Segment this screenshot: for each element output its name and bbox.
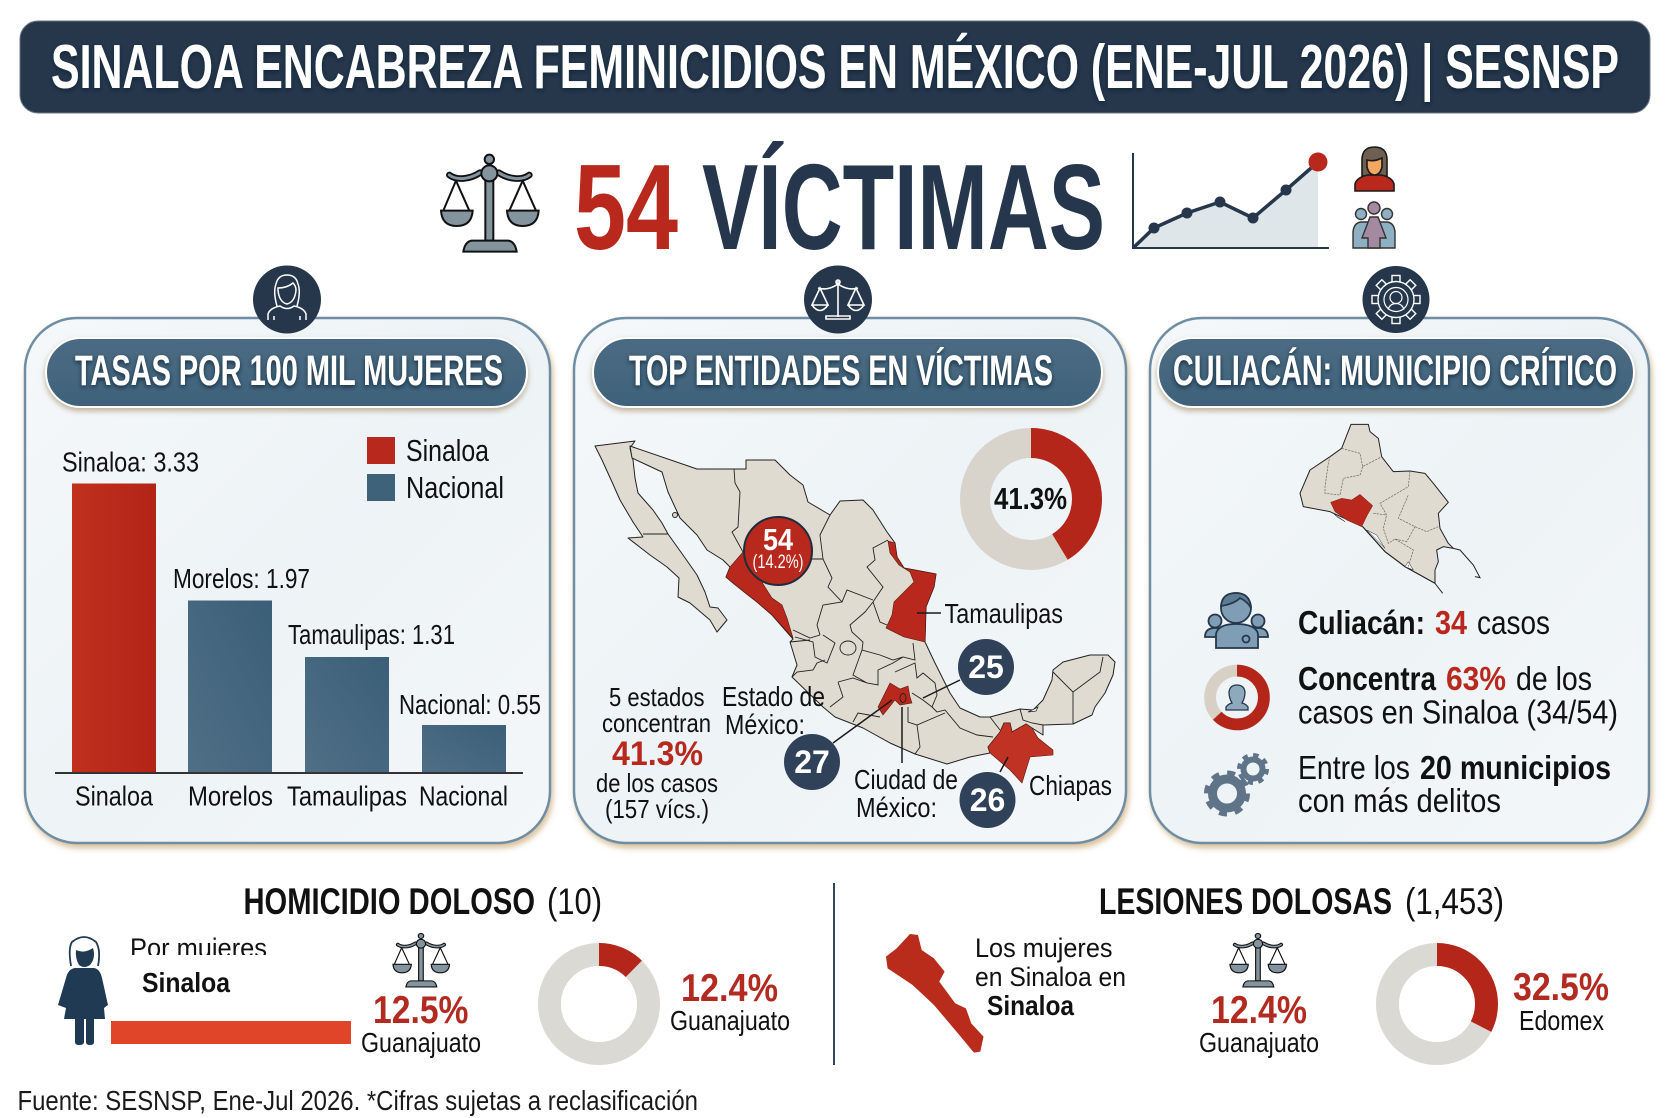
bar chart: Tamaulipas: 1.31 (288, 619, 455, 650)
legend (367, 433, 504, 505)
hero number: 54 víctimas (574, 139, 1105, 275)
donut: 32.5% (1388, 954, 1486, 1054)
callout: Chiapas 26: 26 (970, 782, 1005, 818)
bar chart (55, 446, 541, 812)
stat: 32.5% Edomex: 32.5% (1513, 966, 1609, 1009)
text: Sinaloa: Sinaloa (142, 967, 230, 998)
bar chart: Tamaulipas (287, 780, 407, 812)
section heading: LESIONES DOLOSAS (1099, 881, 1392, 922)
map labels: Tamaulipas (944, 598, 1063, 629)
map of Mexico (595, 441, 1115, 783)
callout: Sinaloa 54 (744, 517, 812, 585)
text: los mujeres en Sinaloa: Sinaloa (987, 990, 1074, 1021)
text: concentra 63%: 63% (1446, 660, 1506, 697)
legend: Nacional (406, 470, 504, 505)
icon: woman silhouette (58, 937, 108, 1045)
donut: 63% (1210, 671, 1264, 724)
text block: 5 estados concentran: de los casos (596, 768, 718, 798)
hero number: 54 víctimas: 54 (574, 139, 678, 275)
panel heading (46, 338, 527, 407)
donut: 41.3% (975, 443, 1087, 555)
stat: 12.4% Guanajuato (1199, 989, 1319, 1058)
stat: 12.5% Guanajuato: Guanajuato (361, 1027, 481, 1058)
text: Culiacán 34 casos: casos (1477, 604, 1550, 641)
stat: 32.5% Edomex (1513, 966, 1609, 1036)
source footnote: Fuente: SESNSP, Ene-Jul 2026. *Cifras sujetas a reclasificación (18, 1085, 698, 1116)
text: 20 municipios: con más delitos (1298, 782, 1501, 819)
text block: 5 estados concentran: 41.3% (612, 735, 703, 773)
hero number: 54 víctimas: VÍCTIMAS (702, 139, 1105, 275)
callout: Edomex 27: 27 (794, 744, 830, 780)
stat: 12.5% Guanajuato (361, 989, 481, 1058)
icon: scales (1230, 933, 1287, 987)
section heading: (1,453) (1405, 881, 1504, 922)
connector lines (833, 613, 1008, 772)
map labels: México: (856, 792, 937, 823)
bar chart: Morelos (188, 780, 273, 812)
section heading: HOMICIDIO DOLOSO (244, 881, 535, 922)
map labels: Estado de (722, 681, 825, 712)
callout: Sinaloa 54: (14.2%) (752, 552, 804, 573)
text: 20 municipios (1298, 749, 1611, 819)
panel: tasas por 100 mil mujeres (25, 266, 550, 843)
clipped text: por mujeres: Por mujeres (130, 933, 267, 963)
text: Culiacán 34 casos: Culiacán: (1298, 604, 1425, 641)
stat: 32.5% Edomex: Edomex (1519, 1005, 1604, 1036)
text block: 5 estados concentran: concentran (602, 708, 711, 738)
state lines (643, 469, 1103, 754)
bar chart: Morelos: 1.97 (173, 563, 310, 594)
section heading: (10) (547, 881, 602, 922)
stat: 12.4% Guanajuato: 12.4% (681, 967, 778, 1010)
callout: Sinaloa 54: 54 (763, 522, 794, 557)
text: 20 municipios: Entre los (1298, 749, 1410, 786)
panel heading: TASAS POR 100 MIL MUJERES (75, 347, 503, 395)
stat: 12.4% Guanajuato: 12.4% (1211, 989, 1307, 1032)
legend: Sinaloa (406, 433, 490, 468)
panel heading: TOP ENTIDADES EN VÍCTIMAS (629, 347, 1053, 395)
orange bar (111, 1021, 351, 1044)
text: concentra 63%: Concentra (1298, 660, 1437, 697)
text block: 5 estados concentran (596, 682, 718, 824)
panel heading (593, 338, 1102, 407)
stat: 12.5% Guanajuato: 12.5% (373, 989, 468, 1032)
text block: 5 estados concentran: 5 estados (609, 682, 704, 712)
callout: CDMX 25 (958, 639, 1014, 695)
bar chart: Sinaloa: 3.33 (62, 446, 199, 478)
icon: gear badge (1362, 266, 1430, 333)
callout: Edomex 27 (784, 734, 840, 790)
stat: 12.4% Guanajuato: Guanajuato (670, 1005, 790, 1036)
icon: people (1205, 593, 1268, 648)
icon: family group (1353, 202, 1395, 248)
map labels (722, 598, 1112, 823)
section: lesiones dolosas (886, 881, 1609, 1058)
text: los mujeres en Sinaloa: Los mujeres (975, 933, 1112, 963)
map labels: Chiapas (1029, 770, 1112, 801)
panel heading (1158, 338, 1634, 407)
icon: woman (1355, 147, 1394, 191)
stat: 12.4% Guanajuato (670, 967, 790, 1036)
text: Culiacán 34 casos: 34 (1435, 604, 1468, 641)
text block: 5 estados concentran: (157 vícs.) (605, 794, 709, 824)
icon: hero scales (441, 155, 539, 252)
bar chart: Nacional (419, 780, 508, 812)
callout: Chiapas 26 (960, 772, 1016, 828)
bar chart: Nacional: 0.55 (399, 689, 541, 720)
panel: top entidades en víctimas (574, 266, 1126, 843)
text: concentra 63% (1298, 660, 1618, 730)
text: los mujeres en Sinaloa: en Sinaloa en (975, 962, 1126, 992)
icon: gears (1206, 755, 1267, 814)
section: homicidio doloso (58, 881, 790, 1058)
donut: 12.4% (550, 954, 648, 1054)
text: 20 municipios: 20 municipios (1420, 749, 1611, 786)
map of Sinaloa with Culiacán (1300, 424, 1480, 593)
text: concentra 63%: casos en Sinaloa (34/54) (1298, 694, 1618, 730)
icon: scales (393, 933, 450, 987)
text: concentra 63%: de los (1516, 660, 1592, 697)
map base (595, 441, 1115, 764)
map labels: México: (725, 709, 805, 740)
panel: Culiacán municipio crítico (1150, 266, 1649, 843)
bar chart: Sinaloa (75, 780, 153, 812)
stat: 12.4% Guanajuato: Guanajuato (1199, 1027, 1319, 1058)
map labels: Ciudad de (854, 764, 958, 795)
icon: scales badge (804, 266, 872, 334)
trend line chart (1133, 152, 1329, 248)
highlighted states (726, 541, 1053, 783)
icon: Sinaloa silhouette (886, 934, 984, 1053)
text: Culiacán 34 casos (1298, 604, 1550, 641)
donut: 41.3%: 41.3% (994, 481, 1067, 516)
callout: CDMX 25: 25 (968, 649, 1004, 685)
text: los mujeres en Sinaloa (975, 933, 1126, 1021)
icon: woman badge (253, 266, 321, 334)
